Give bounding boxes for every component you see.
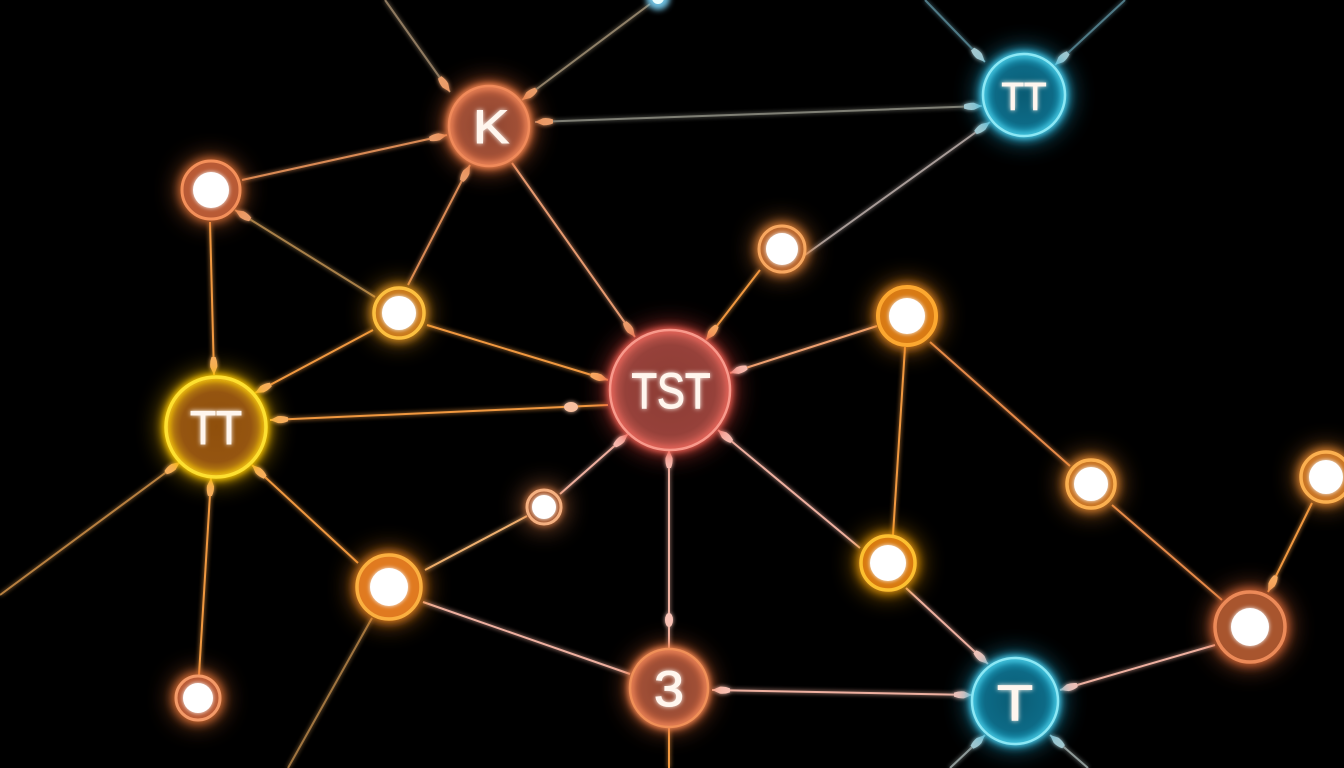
arrow: orange node to small node <box>425 516 527 570</box>
node: 3: 3 <box>654 661 684 717</box>
arrow: blue T lower left <box>950 735 985 768</box>
arrow: node 3 to blue T <box>712 690 972 695</box>
node: small white <box>522 485 566 529</box>
node: upper-left white <box>178 157 244 223</box>
arrow: node 3 downward <box>668 728 670 768</box>
arrow: blue T lower right <box>1050 735 1088 768</box>
arrow: yellow node to K <box>408 165 470 285</box>
arrow: yellow node to yellow TT <box>255 330 373 393</box>
node: 3 <box>626 645 712 731</box>
arrow: orange node to right node <box>930 342 1070 466</box>
node: blue TT: TT <box>1002 76 1046 119</box>
node: top partial <box>646 0 670 10</box>
node: peach white <box>754 221 810 277</box>
arrow: orange node to TST <box>730 326 877 373</box>
node: yellow TT: TT <box>190 401 242 454</box>
node: bottom right white <box>1209 586 1291 668</box>
node: K <box>443 80 535 172</box>
arrow: bottom-right node to blue T <box>1060 645 1215 690</box>
arrow: top node to K <box>522 4 650 100</box>
arrow: node 3 to TST <box>668 450 670 648</box>
node: orange lower left <box>351 549 427 625</box>
node: TST <box>604 324 736 456</box>
arrow: far-right node to bottom-right node <box>1268 503 1312 592</box>
arrow: yellow node to upper-left node <box>235 210 375 297</box>
edge bead: TST left <box>564 402 578 412</box>
node: blue T: T <box>997 675 1033 731</box>
arrow: K to TST <box>512 163 635 337</box>
node: orange lower centre <box>855 530 921 596</box>
arrow: yellow node to TST <box>427 325 608 380</box>
node: far right white <box>1296 447 1344 507</box>
arrow: orange node to yellow TT <box>252 465 358 563</box>
arrow: lower orange node to TST <box>718 430 860 548</box>
arrow: upper-left node to K <box>242 135 447 180</box>
arrow: lower orange node to upper orange node <box>893 347 905 535</box>
arrow: right node to bottom-right node <box>1112 505 1222 600</box>
arrow: lower orange node to blue T <box>906 588 988 664</box>
arrow: peach node to blue TT <box>805 122 990 255</box>
arrow: top left to K <box>385 0 450 92</box>
arrow: K to blue TT <box>535 106 982 122</box>
arrow: off-page to yellow TT <box>0 462 180 595</box>
node: K: K <box>473 100 509 153</box>
node: yellow TT <box>160 371 272 483</box>
arrow: TST to yellow TT <box>270 405 608 420</box>
arrow: bottom-left node to yellow TT <box>199 478 211 675</box>
arrow: small node to TST <box>560 434 628 494</box>
node: blue T <box>967 653 1063 749</box>
node: orange upper right <box>872 281 942 351</box>
arrow: orange node to off-page <box>288 618 372 768</box>
arrow: top to blue TT right <box>1055 0 1125 65</box>
arrow: peach node to TST <box>706 270 760 340</box>
node: bottom left white <box>171 671 225 725</box>
arrow: upper-left node to yellow TT <box>210 222 214 375</box>
arrow: orange node to node 3 <box>423 602 630 674</box>
node: TST: TST <box>632 363 710 419</box>
node: blue TT <box>977 48 1071 142</box>
arrow: top to blue TT left <box>925 0 985 62</box>
node: right white <box>1061 454 1121 514</box>
edge bead: node 3 upper <box>665 613 673 627</box>
node: yellow white <box>369 283 429 343</box>
